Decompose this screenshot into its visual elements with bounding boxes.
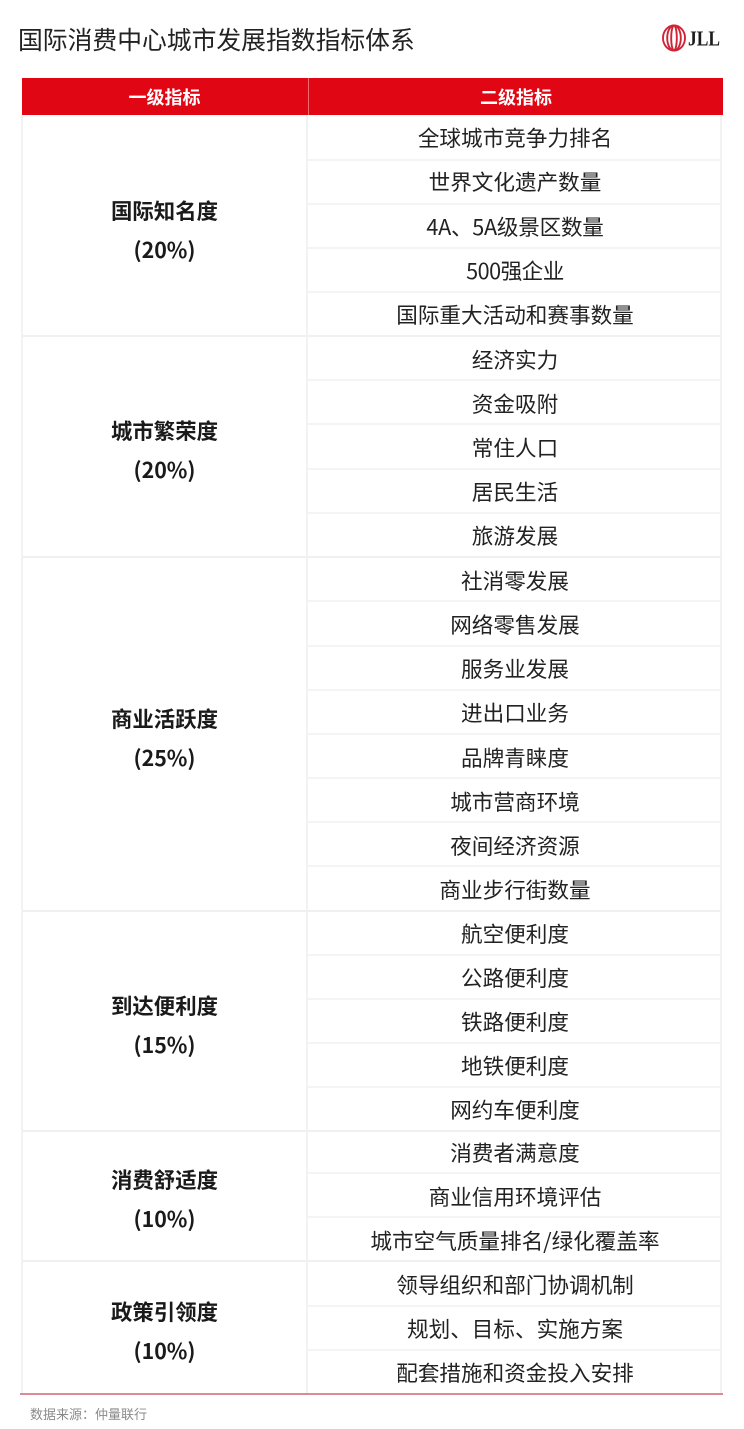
row: 城市空气质量排名/绿化覆盖率	[370, 1225, 660, 1256]
category: 消费舒适度	[111, 1164, 218, 1234]
category: 商业活跃度: (25%)	[133, 742, 196, 773]
row: 常住人口	[472, 432, 558, 463]
row: 网约车便利度	[450, 1094, 580, 1125]
row: 公路便利度	[461, 962, 569, 993]
row: 配套措施和资金投入安排	[396, 1357, 634, 1388]
category: 政策引领度: 政策引领度	[111, 1296, 218, 1327]
category: 城市繁荣度: 城市繁荣度	[111, 415, 218, 446]
row: 商业信用环境评估	[429, 1181, 601, 1212]
row: 资金吸附	[472, 388, 558, 419]
row: 进出口业务	[461, 697, 569, 728]
column divider	[306, 115, 308, 1394]
row: 500强企业	[466, 255, 564, 286]
category: 城市繁荣度	[111, 415, 218, 485]
header: level two	[308, 78, 723, 115]
table bottom rule	[20, 1393, 723, 1395]
row: 夜间经济资源	[450, 830, 580, 861]
category: 到达便利度: (15%)	[133, 1029, 196, 1060]
row: 经济实力	[472, 344, 558, 375]
row: 世界文化遗产数量	[429, 166, 601, 197]
category: 国际知名度	[111, 195, 218, 265]
icon: JLL logo	[662, 24, 720, 52]
row: 网络零售发展	[450, 609, 580, 640]
category: 城市繁荣度: (20%)	[133, 454, 196, 485]
category: 消费舒适度: (10%)	[133, 1203, 196, 1234]
row: 航空便利度	[461, 918, 569, 949]
row: 居民生活	[472, 476, 558, 507]
row: 社消零发展	[461, 565, 569, 596]
category: 到达便利度	[111, 990, 218, 1060]
row: 全球城市竞争力排名	[418, 122, 612, 153]
row: 国际重大活动和赛事数量	[396, 299, 634, 330]
row: 服务业发展	[461, 653, 569, 684]
table header	[22, 78, 723, 115]
category: 到达便利度: 到达便利度	[111, 990, 218, 1021]
row: 领导组织和部门协调机制	[396, 1269, 634, 1300]
row: 城市营商环境	[450, 786, 580, 817]
row: 旅游发展	[472, 520, 558, 551]
row: 品牌青睐度	[461, 742, 569, 773]
title: 国际消费中心城市发展指数指标体系	[18, 21, 415, 57]
category: 政策引领度: (10%)	[133, 1335, 196, 1366]
category: 商业活跃度	[111, 703, 218, 773]
row: 规划、目标、实施方案	[407, 1313, 623, 1344]
row: 4A、5A级景区数量	[426, 211, 604, 242]
row: 地铁便利度	[461, 1050, 569, 1081]
row: 铁路便利度	[461, 1006, 569, 1037]
category: 国际知名度: (20%)	[133, 234, 196, 265]
row: 商业步行街数量	[439, 874, 591, 905]
header: level one: 一级指标	[128, 84, 200, 110]
header: level two: 二级指标	[480, 84, 552, 110]
row: 消费者满意度	[450, 1137, 580, 1168]
category: 消费舒适度: 消费舒适度	[111, 1164, 218, 1195]
category: 商业活跃度: 商业活跃度	[111, 703, 218, 734]
category: 国际知名度: 国际知名度	[111, 195, 218, 226]
category: 政策引领度	[111, 1296, 218, 1366]
source note: 数据来源：仲量联行	[30, 1404, 147, 1423]
